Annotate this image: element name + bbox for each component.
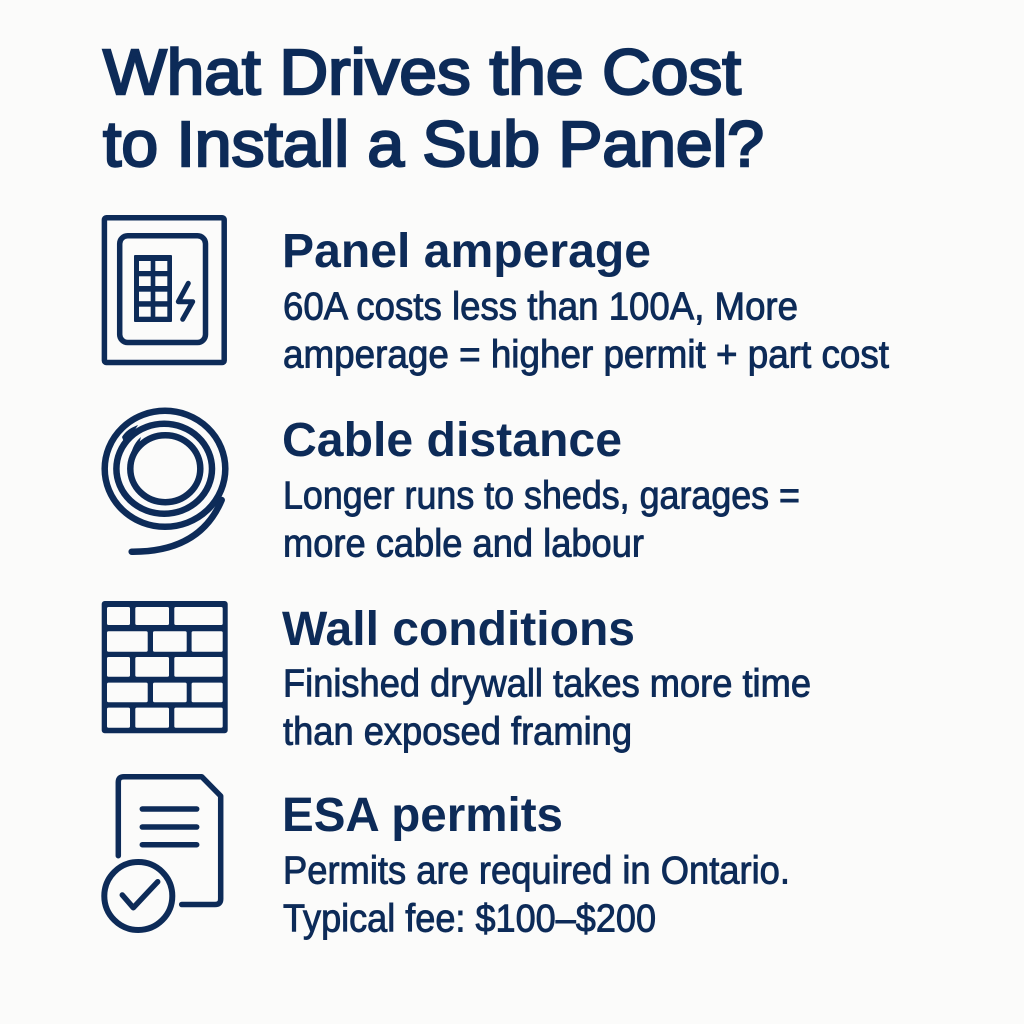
panel: cable distance xyxy=(105,411,800,566)
text: wall conditions description: than exposed framing xyxy=(283,710,632,754)
heading: wall conditions: Wall conditions xyxy=(282,603,635,656)
text: ESA permits description: Permits are required in Ontario. xyxy=(283,850,790,892)
text: cable distance description xyxy=(283,474,800,566)
text: ESA permits description: Typical fee: $100–$200 xyxy=(283,898,656,940)
heading: panel amperage: Panel amperage xyxy=(282,225,651,278)
text: panel amperage description xyxy=(283,286,889,376)
text: panel amperage description: 60A costs less than 100A, More xyxy=(283,286,798,328)
text: panel amperage description: amperage = higher permit + part cost xyxy=(283,334,889,376)
heading: ESA permits: ESA permits xyxy=(282,789,563,842)
icon: permit document with check xyxy=(104,777,221,930)
text: ESA permits description xyxy=(283,850,790,940)
title: to Install a Sub Panel? xyxy=(103,108,764,180)
text: wall conditions description xyxy=(283,662,811,754)
icon: electrical panel xyxy=(104,218,224,362)
title xyxy=(103,36,764,180)
text: cable distance description: Longer runs to sheds, garages = xyxy=(283,474,800,518)
panel: panel amperage xyxy=(104,218,889,376)
text: wall conditions description: Finished drywall takes more time xyxy=(283,662,811,706)
panel: ESA permits xyxy=(104,777,790,940)
icon: cable coil xyxy=(105,411,225,552)
heading: cable distance: Cable distance xyxy=(282,414,622,467)
panel: wall conditions xyxy=(102,601,811,754)
text: cable distance description: more cable and labour xyxy=(283,522,644,566)
title: What Drives the Cost xyxy=(103,36,741,108)
icon: brick wall xyxy=(102,601,228,733)
